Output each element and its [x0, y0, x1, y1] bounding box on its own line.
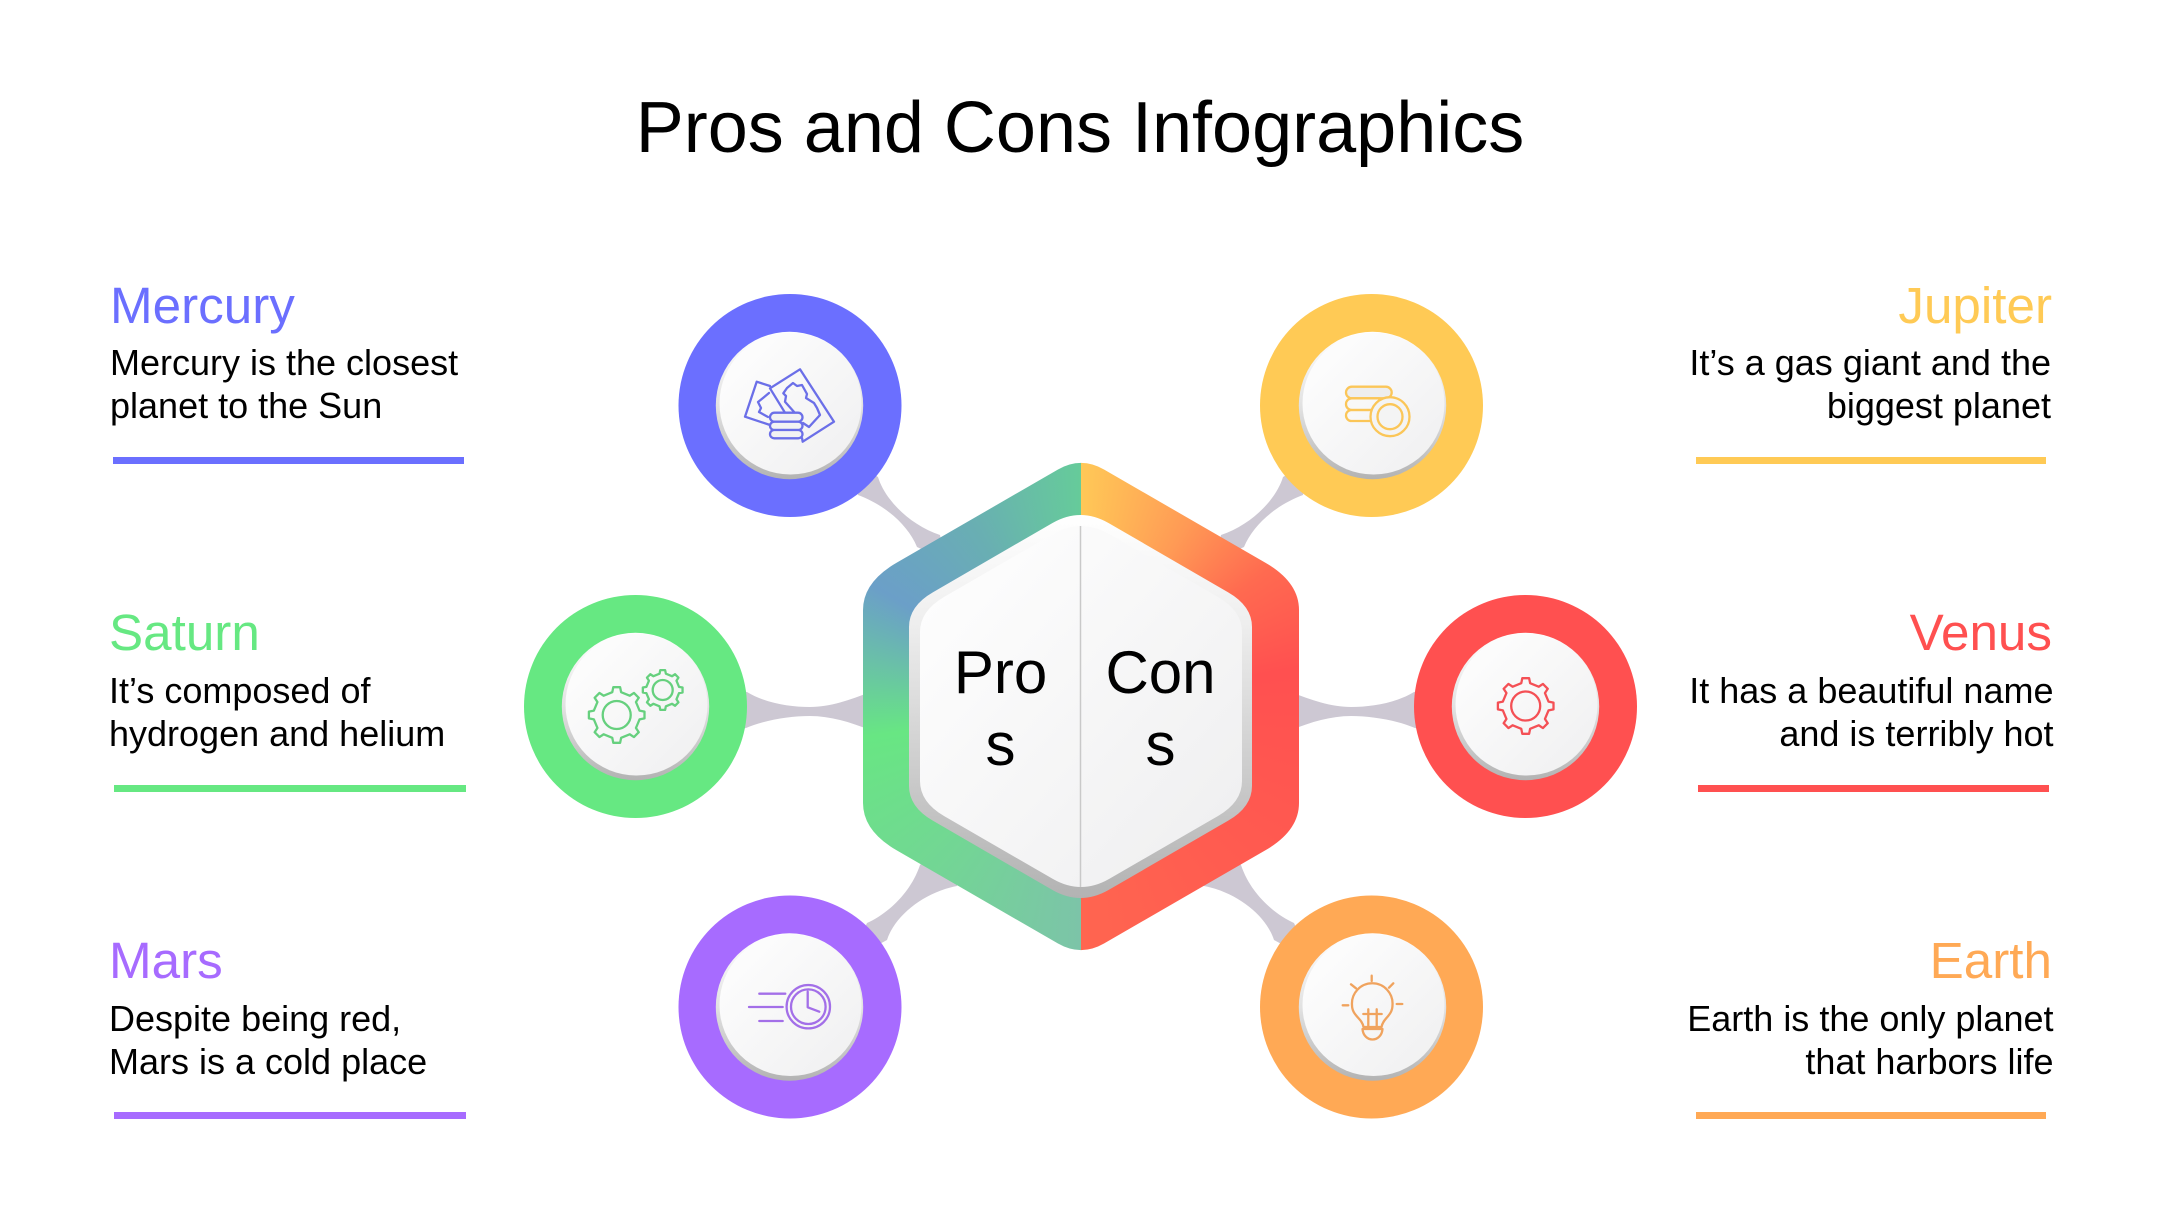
text block: Saturn: hydrogen and helium	[109, 713, 445, 754]
hexagon bevel	[909, 515, 1252, 898]
icon: two gears	[589, 670, 683, 743]
text block: Mars: Mars	[109, 932, 223, 989]
text block: Venus	[1689, 604, 2054, 792]
text block: Jupiter	[1689, 277, 2052, 464]
text block: Earth: Earth	[1930, 932, 2052, 989]
text block: Jupiter: It’s a gas giant and the	[1689, 342, 2051, 383]
text block: Mars: Despite being red,	[109, 998, 401, 1039]
text block: Earth: that harbors life	[1805, 1041, 2054, 1082]
connector: Mercury	[850, 460, 945, 560]
panel: central hexagon	[909, 515, 1252, 898]
icon: light bulb	[1343, 976, 1402, 1040]
label: Cons: Con	[1105, 639, 1216, 706]
label: Pros: s	[986, 711, 1016, 778]
text block: Saturn: It’s composed of	[109, 670, 371, 711]
connector: Venus	[1291, 690, 1426, 730]
text block: Jupiter: Jupiter	[1898, 277, 2052, 334]
text block: Jupiter: biggest planet	[1827, 385, 2051, 426]
hexagon gradient ring	[863, 462, 1299, 951]
connector: Saturn	[735, 690, 870, 730]
text block: Earth: Earth is the only planet	[1687, 998, 2054, 1039]
icon: fast clock	[749, 985, 830, 1028]
text block: Earth	[1687, 932, 2054, 1119]
title: Pros and Cons Infographics	[636, 88, 1524, 168]
text block: Mercury	[110, 277, 464, 464]
icon: gear	[1498, 678, 1554, 734]
icon: money	[745, 369, 834, 442]
node: Saturn circle	[524, 595, 747, 818]
text block: Venus: Venus	[1910, 604, 2052, 661]
icon: coins	[1346, 387, 1410, 436]
label: Pros: Pro	[954, 639, 1047, 706]
node: Earth circle	[1260, 896, 1483, 1118]
text block: Saturn	[109, 604, 466, 792]
node: Mercury circle	[678, 294, 902, 517]
text block: Mars	[109, 932, 466, 1119]
text block: Mercury: Mercury	[110, 277, 295, 334]
text block: Saturn: Saturn	[109, 604, 260, 661]
node: Jupiter circle	[1260, 294, 1483, 517]
node: Mars circle	[678, 896, 902, 1118]
label: Cons: s	[1146, 711, 1176, 778]
hexagon face	[920, 526, 1242, 887]
connector: Jupiter	[1216, 460, 1311, 560]
connector: Mars	[850, 855, 965, 960]
text block: Mars: Mars is a cold place	[109, 1041, 427, 1082]
text block: Mercury: Mercury is the closest	[110, 342, 458, 383]
text block: Venus: It has a beautiful name	[1689, 670, 2054, 711]
text block: Mercury: planet to the Sun	[110, 385, 382, 426]
text block: Venus: and is terribly hot	[1779, 713, 2054, 754]
connector: Earth	[1196, 855, 1311, 960]
node: Venus circle	[1414, 595, 1637, 818]
